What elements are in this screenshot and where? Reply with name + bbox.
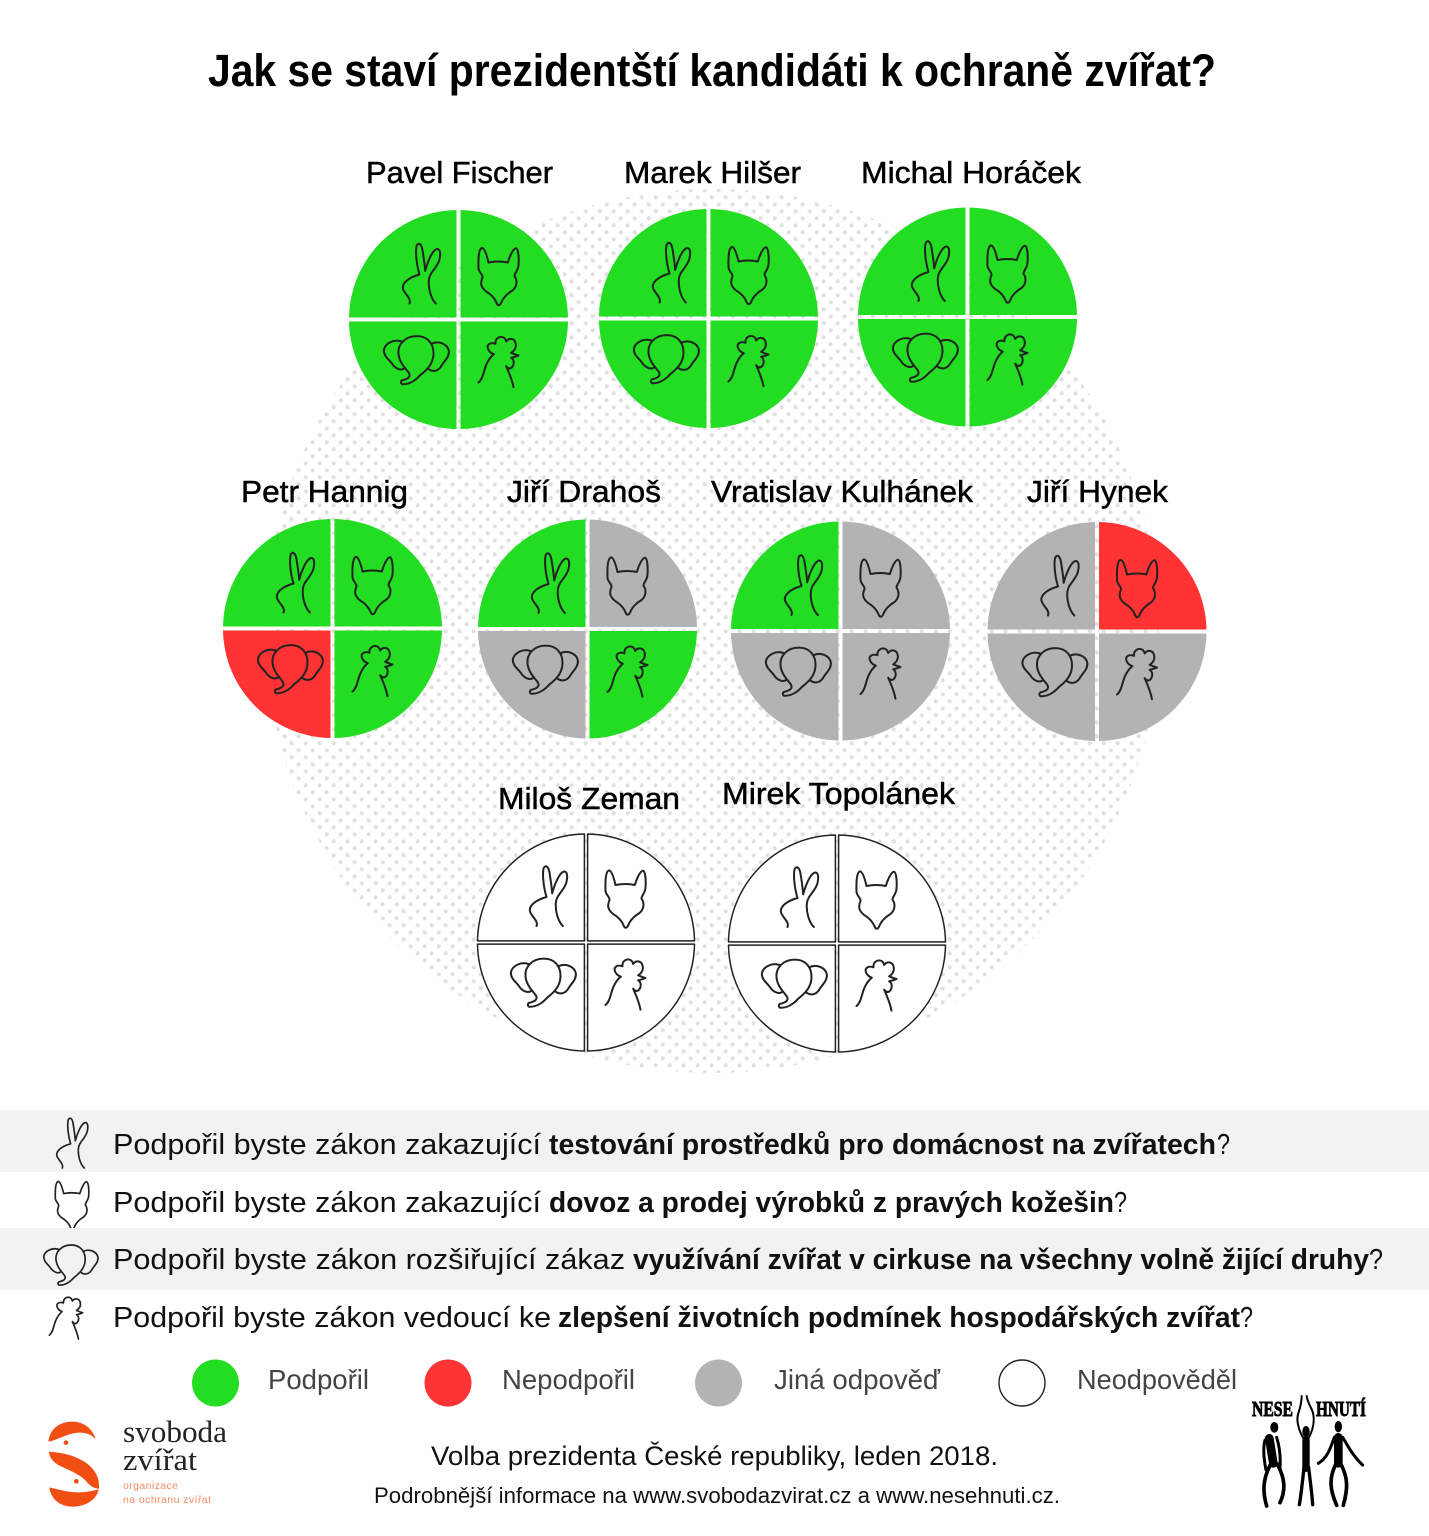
footer line: election: Volba prezidenta České republiky, leden 2018. bbox=[431, 1440, 998, 1471]
question row 1: testing on animals bbox=[0, 1110, 1429, 1172]
question row 1: testing on animals: Podpořil byste zákon zakazující bbox=[113, 1129, 541, 1161]
question row 2: fur products: dovoz a prodej výrobků z pravých kožešin bbox=[549, 1187, 1114, 1219]
candidate name: Jiří Drahoš: Jiří Drahoš bbox=[507, 474, 661, 509]
logo: Nese Hnutí: HNUTÍ bbox=[1316, 1397, 1366, 1421]
pie: Miloš Zeman (no answer) bbox=[478, 834, 694, 1051]
question row 4: farm animals: ? bbox=[1240, 1302, 1253, 1334]
title: Jak se staví prezidentští kandidáti k ochraně zvířat? bbox=[208, 45, 1216, 96]
logo: Svoboda zvířat: organizace bbox=[123, 1480, 178, 1492]
question row 4: farm animals: Podpořil byste zákon vedoucí ke bbox=[113, 1302, 551, 1334]
candidate name: Miloš Zeman: Miloš Zeman bbox=[498, 781, 680, 816]
pie: Jiří Hynek bbox=[988, 522, 1206, 741]
candidate name: Jiří Hynek: Jiří Hynek bbox=[1027, 474, 1169, 509]
question row 2: fur products bbox=[55, 1181, 1127, 1229]
pie: Petr Hannig bbox=[223, 519, 442, 738]
pie: Pavel Fischer bbox=[349, 210, 568, 429]
question row 4: farm animals: zlepšení životních podmínek hospodářských zvířat bbox=[558, 1302, 1240, 1334]
legend: other answer: Jiná odpověď bbox=[774, 1364, 941, 1395]
pie: Marek Hilšer bbox=[599, 209, 818, 428]
legend: not supported bbox=[424, 1360, 635, 1406]
logo: Svoboda zvířat: na ochranu zvířat bbox=[123, 1494, 211, 1506]
question row 1: testing on animals: testování prostředků pro domácnost na zvířatech bbox=[549, 1129, 1216, 1161]
legend: no answer bbox=[999, 1360, 1237, 1406]
question row 2: fur products: ? bbox=[1114, 1187, 1127, 1219]
logo: Svoboda zvířat: zvířat bbox=[123, 1442, 197, 1477]
legend: supported: Podpořil bbox=[268, 1364, 369, 1395]
question row 3: circus animals: Podpořil byste zákon rozšiřující zákaz bbox=[113, 1244, 625, 1276]
candidate name: Petr Hannig: Petr Hannig bbox=[241, 474, 408, 509]
question row 3: circus animals: využívání zvířat v cirkuse na všechny volně žijící druhy bbox=[633, 1244, 1369, 1276]
logo: Nese Hnutí bbox=[1252, 1396, 1366, 1506]
legend: other answer bbox=[695, 1360, 941, 1406]
question row 2: fur products: Podpořil byste zákon zakazující bbox=[113, 1187, 541, 1219]
question row 3: circus animals: ? bbox=[1369, 1244, 1383, 1276]
candidate name: Marek Hilšer: Marek Hilšer bbox=[624, 155, 801, 190]
footer line: more information: Podrobnější informace na www.svobodazvirat.cz a www.nesehnuti.cz. bbox=[374, 1483, 1060, 1508]
pie: Vratislav Kulhánek bbox=[731, 522, 950, 740]
candidate name: Vratislav Kulhánek: Vratislav Kulhánek bbox=[711, 474, 974, 509]
pie: Michal Horáček bbox=[858, 208, 1077, 426]
legend: no answer: Neodpověděl bbox=[1077, 1364, 1237, 1395]
question row 1: testing on animals: ? bbox=[1217, 1129, 1230, 1161]
candidate name: Pavel Fischer: Pavel Fischer bbox=[366, 155, 553, 190]
question row 3: circus animals bbox=[0, 1228, 1429, 1290]
background dotted circle bbox=[265, 189, 1159, 1073]
candidate name: Mirek Topolánek: Mirek Topolánek bbox=[722, 776, 956, 811]
logo: Svoboda zvířat bbox=[48, 1414, 227, 1507]
pie: Mirek Topolánek (no answer) bbox=[728, 835, 946, 1052]
pie: Jiří Drahoš bbox=[478, 520, 697, 738]
legend: supported bbox=[192, 1360, 369, 1406]
legend: not supported: Nepodpořil bbox=[502, 1364, 635, 1395]
question row 4: farm animals bbox=[49, 1297, 1253, 1339]
logo: Nese Hnutí: NESE bbox=[1252, 1397, 1293, 1421]
logo: Svoboda zvířat: svoboda bbox=[123, 1414, 227, 1449]
candidate name: Michal Horáček: Michal Horáček bbox=[861, 155, 1082, 190]
